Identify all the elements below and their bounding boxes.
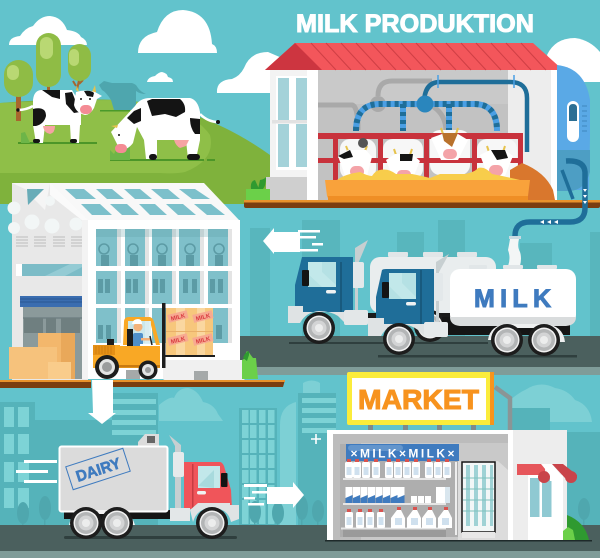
forklift (93, 303, 215, 380)
loading dock (163, 360, 245, 380)
dairy stamp: DAIRY (74, 455, 124, 486)
cloud lower right (510, 384, 592, 422)
front bumper and fender (368, 318, 434, 336)
front wheels (383, 323, 560, 356)
barn left wall (270, 70, 318, 201)
loading door (20, 296, 82, 379)
chassis (442, 317, 570, 335)
cooler unit (138, 434, 159, 446)
MILK label on tanker: MILK (474, 285, 551, 313)
sign posts (368, 425, 476, 431)
green hillside (0, 99, 270, 204)
sign bracket (495, 387, 510, 430)
bottles row 1 (345, 459, 451, 478)
arrow pointing left (263, 228, 323, 254)
bush by market (563, 515, 589, 540)
market (325, 372, 592, 542)
road behind trucks (240, 336, 600, 375)
plant by barn (246, 177, 270, 200)
feed trough (325, 180, 530, 200)
grey pipe joint (370, 96, 386, 112)
rear wheels (303, 310, 446, 344)
clouds in the sky (9, 10, 600, 93)
forklift driver (127, 319, 152, 347)
cow standing (16, 85, 102, 144)
milk crates on forklift (166, 308, 214, 355)
blue milk tank (557, 65, 590, 191)
jugs row 3 (345, 507, 452, 528)
red rack (318, 133, 523, 183)
front exhaust (436, 254, 449, 325)
cloud lower left (159, 388, 223, 421)
shelves with milk (341, 459, 457, 537)
rear fenders (69, 510, 135, 525)
front milk truck (368, 254, 577, 358)
dairy truck (60, 434, 239, 539)
building behind market (510, 408, 600, 525)
sparkle (311, 434, 321, 444)
door and window (528, 475, 563, 541)
grey background pipes (318, 81, 446, 130)
factory (8, 183, 245, 380)
front cab (376, 269, 434, 324)
cardboard boxes (9, 333, 75, 379)
rear truck exhaust (355, 240, 368, 312)
factory left facade (12, 183, 88, 380)
barn right wall (508, 70, 557, 201)
dairy stamp (66, 448, 130, 490)
rear tanker (368, 252, 496, 323)
cow grazing (110, 98, 220, 161)
vent louvers (16, 237, 84, 246)
shelf under barn (244, 200, 600, 208)
faded city buildings behind trucks (250, 220, 600, 336)
milk banner: ×MILK×MILK× (350, 446, 454, 460)
hay pile (510, 163, 555, 200)
fridge (462, 462, 495, 538)
title: MILK PRODUKTION (296, 10, 534, 38)
barn window (272, 76, 312, 170)
market sign: MARKET (358, 384, 479, 415)
market side wall (513, 430, 567, 541)
tanker (450, 265, 576, 326)
awning (517, 464, 577, 483)
cartons row 2 (346, 487, 450, 503)
forklift cab frame (123, 317, 160, 345)
building grid (239, 408, 277, 525)
rear bumper and fender (288, 306, 353, 323)
forklift wheels (95, 355, 158, 380)
roadside trees (17, 496, 590, 526)
hay in trough (337, 168, 520, 180)
forklift body (93, 345, 160, 368)
cargo box (60, 446, 168, 512)
building right with cloud (280, 380, 336, 525)
rear cab (295, 257, 353, 312)
barn roof (265, 43, 563, 70)
arrow pointing right (244, 482, 304, 508)
factory roof (50, 183, 239, 220)
MILK label 3: MILK (170, 336, 187, 346)
market sign (347, 372, 494, 425)
mast and forks (162, 303, 166, 368)
MILK label 2: MILK (195, 313, 212, 323)
barn cows (338, 128, 513, 179)
MILK label 1: MILK (170, 313, 187, 323)
factory windows (96, 229, 232, 343)
market interior (333, 434, 508, 541)
plant by factory (242, 351, 258, 379)
truck wheels (70, 507, 228, 539)
distant blue cow (99, 81, 146, 112)
market base line (325, 540, 592, 542)
cab bumper and step (170, 508, 190, 521)
red cab (184, 462, 232, 509)
milk pipes (356, 75, 527, 152)
white arrow down from factory (88, 380, 116, 424)
milk pipe to trucks (509, 161, 587, 239)
faded city lower band (0, 380, 600, 526)
truck exhaust (169, 435, 181, 509)
cow bodies behind rack (340, 130, 517, 179)
shelf under factory (0, 380, 285, 388)
building left (0, 402, 112, 525)
trees (4, 33, 91, 121)
factory right facade (88, 220, 240, 379)
milk stream (508, 239, 521, 266)
rear milk truck (288, 240, 496, 344)
market building (327, 430, 567, 541)
building striped (112, 393, 158, 525)
MILK label 4: MILK (195, 336, 212, 346)
barn (265, 43, 563, 201)
pipe junction (416, 96, 434, 112)
speed lines behind dairy truck (16, 460, 57, 483)
barn interior (318, 70, 510, 201)
steam clouds (8, 196, 82, 234)
truck chassis (64, 510, 172, 519)
road bottom (0, 525, 600, 558)
factory strip window (16, 264, 84, 276)
